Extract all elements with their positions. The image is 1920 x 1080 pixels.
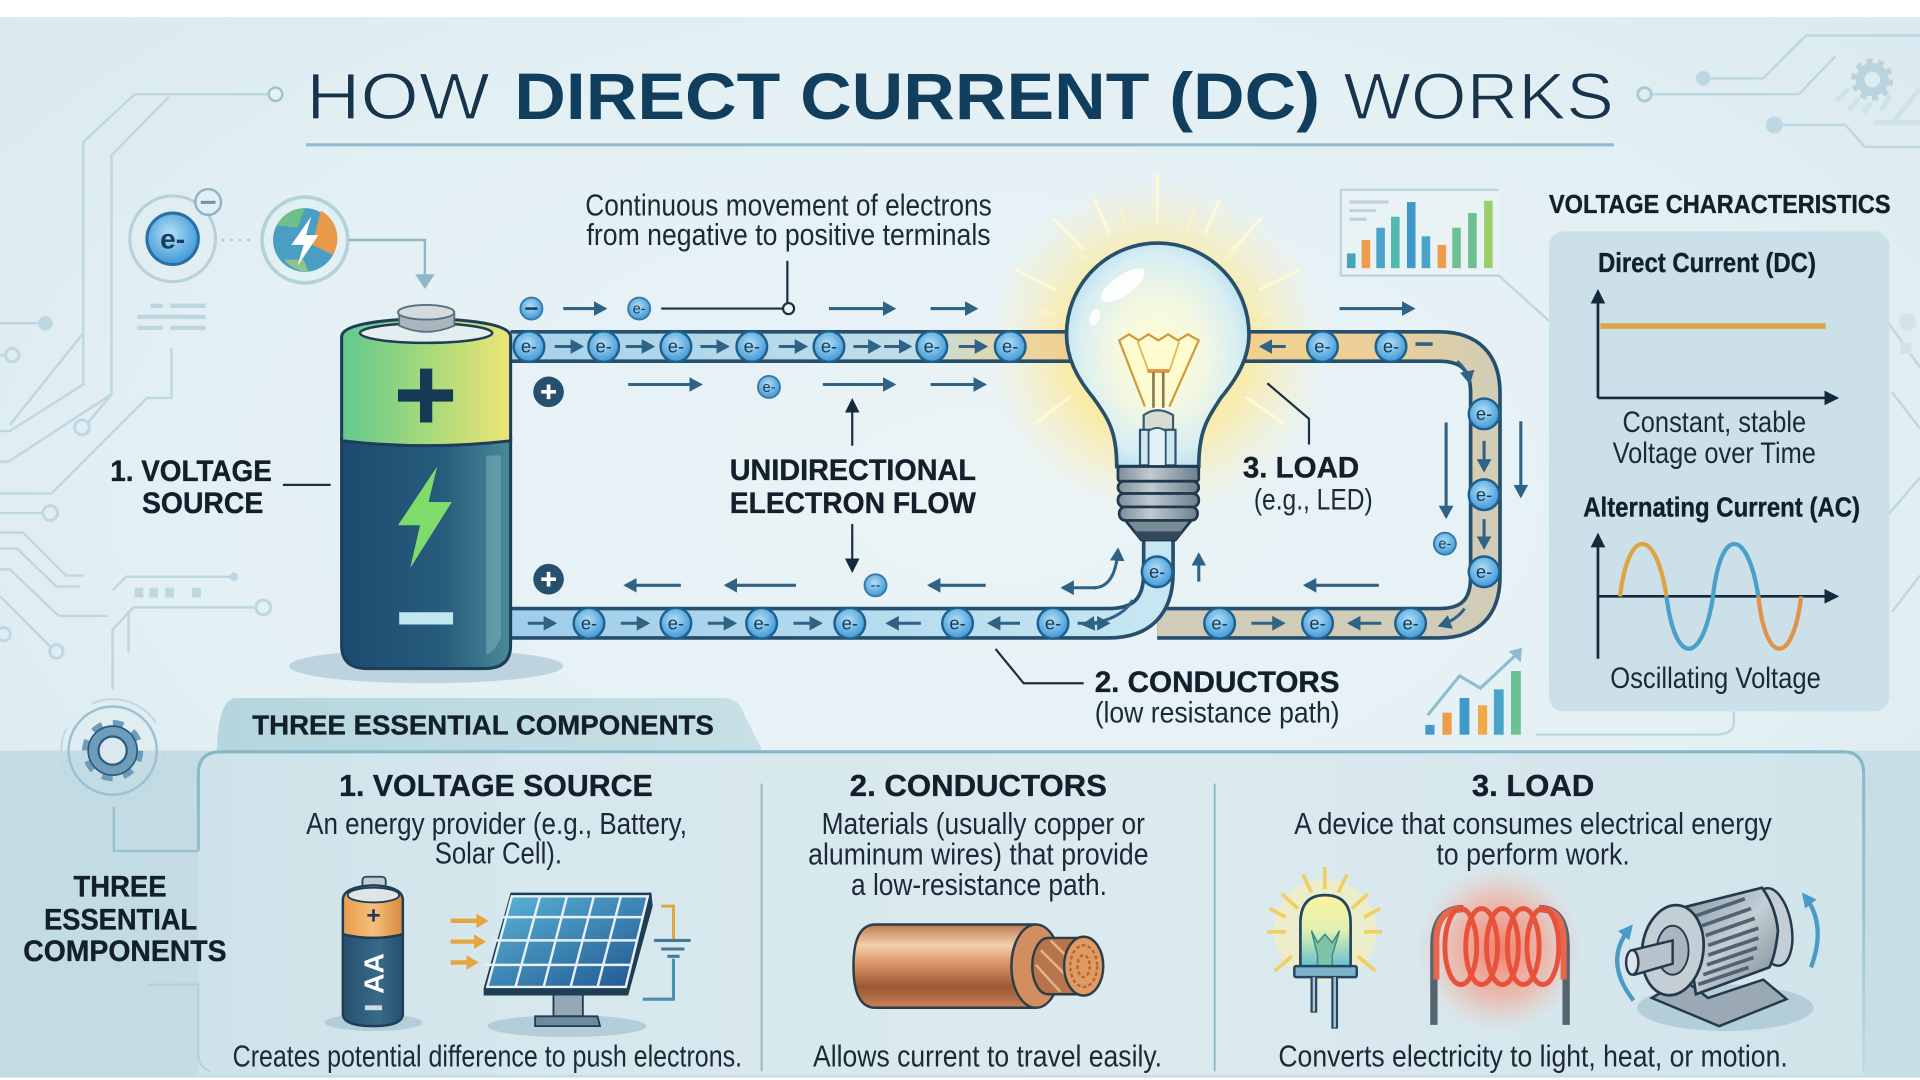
title: WORKS (1343, 60, 1614, 134)
title: DIRECT CURRENT (DC) (514, 60, 1320, 134)
electrons on bottom wire: e- (949, 612, 966, 633)
icon: copper wire (853, 924, 1103, 1008)
column 1: voltage source: Solar Cell). (435, 836, 562, 870)
column 2: conductors: 2. CONDUCTORS (850, 769, 1107, 803)
ac chart (1583, 492, 1860, 695)
electrons on bottom wire (528, 557, 1464, 639)
electrons on top wire: e- (744, 336, 760, 357)
callout: continuous movement: Continuous movement of electrons (585, 189, 992, 223)
icon: AA battery: AA (358, 953, 389, 994)
column 3: load: A device that consumes electrical energy (1294, 807, 1772, 841)
bulb glow (984, 178, 1327, 520)
icon: heating coil (1417, 866, 1583, 1032)
icon: solar panel (484, 893, 691, 1037)
column 3: load: to perform work. (1436, 837, 1630, 871)
label: unidirectional electron flow (730, 400, 976, 571)
column 3: load (1267, 769, 1818, 1074)
electrons on bottom wire: e- (753, 612, 770, 633)
ac chart: Oscillating Voltage (1610, 662, 1821, 695)
positive terminal markers (533, 377, 564, 594)
label: 2. conductors (996, 649, 1340, 729)
icon: gear (61, 699, 198, 851)
bottom band (0, 751, 1920, 1078)
dc chart: Constant, stable (1622, 406, 1806, 439)
column 3: load: Converts electricity to light, heat, or motion. (1278, 1040, 1788, 1074)
electrons on top wire: e- (521, 336, 537, 357)
column 3: load: 3. LOAD (1472, 769, 1594, 803)
electrons on bottom wire: e- (1211, 612, 1228, 633)
left label: three essential components (23, 870, 227, 968)
title: HOW (306, 60, 490, 134)
label: 1. voltage source: 1. VOLTAGE (110, 455, 272, 488)
bulb glass (1067, 243, 1249, 467)
dc chart (1598, 247, 1837, 470)
column 1: voltage source: An energy provider (e.g., Battery, (306, 807, 687, 841)
free electrons and arrows: e- (1438, 537, 1452, 553)
electrons on right wire: e- (1476, 403, 1492, 424)
electrons on right wire: e- (1476, 484, 1492, 505)
column 2: conductors: a low-resistance path. (851, 868, 1107, 902)
electrons on top wire: e- (668, 336, 684, 357)
free electrons and arrows: e- (633, 301, 646, 317)
electrons on bottom wire: e- (1402, 612, 1419, 633)
callout: continuous movement (585, 189, 992, 314)
column 2: conductors (808, 769, 1162, 1074)
column 1: voltage source: 1. VOLTAGE SOURCE (339, 769, 653, 803)
panel: components (147, 752, 1864, 1075)
panel: voltage characteristics (1549, 231, 1889, 711)
tab: three essential components: THREE ESSENTIAL COMPONENTS (252, 710, 714, 741)
left label: three essential components: ESSENTIAL (44, 903, 197, 936)
electrons on bottom wire: e- (1149, 561, 1165, 582)
free electrons and arrows: e- (762, 380, 776, 396)
stem (1144, 410, 1173, 430)
column 2: conductors: aluminum wires) that provide (808, 837, 1149, 871)
column 1: voltage source (233, 769, 742, 1074)
left label: three essential components: THREE (73, 870, 167, 903)
electrons on bottom wire: e- (1045, 612, 1061, 633)
dc chart: Direct Current (DC) (1598, 247, 1816, 278)
electrons on top wire: e- (1383, 336, 1399, 357)
left label: three essential components: COMPONENTS (23, 935, 227, 968)
free electrons and arrows (520, 298, 1521, 596)
bottom wire (511, 534, 1158, 623)
ac chart: Alternating Current (AC) (1583, 492, 1860, 523)
icon: sun arrows (451, 921, 485, 962)
icon: LED (1267, 867, 1382, 1029)
heading: voltage characteristics: VOLTAGE CHARACTERISTICS (1549, 191, 1891, 219)
icon: motor (1617, 885, 1818, 1031)
light bulb (1015, 174, 1300, 540)
label: 2. conductors: 2. CONDUCTORS (1095, 666, 1340, 699)
electrons on top wire: e- (1314, 336, 1331, 357)
electrons on bottom wire: e- (668, 612, 684, 633)
icon: electron and energy source (130, 189, 435, 330)
screw base (1118, 467, 1199, 520)
label: 3. load: 3. LOAD (1243, 452, 1359, 485)
column 2: conductors: Allows current to travel easily. (813, 1040, 1162, 1074)
electrons on top wire: e- (924, 336, 940, 357)
electrons on top wire: e- (596, 336, 612, 357)
title (269, 60, 1614, 146)
electrons on right wire: e- (1476, 561, 1492, 582)
column 2: conductors: Materials (usually copper or (822, 807, 1145, 841)
label: 3. load (1243, 383, 1373, 516)
battery (289, 305, 563, 683)
electrons on bottom wire: e- (842, 612, 858, 633)
free electrons and arrows: -- (871, 578, 881, 594)
tab: three essential components (217, 698, 763, 752)
top wire (511, 333, 1078, 360)
electrons on bottom wire: e- (581, 612, 597, 633)
label: unidirectional electron flow: ELECTRON FLOW (730, 487, 976, 520)
electrons on right wire (1469, 399, 1499, 587)
chart icon growth (1425, 648, 1522, 735)
electrons on top wire (514, 331, 1469, 382)
dc chart: Voltage over Time (1613, 437, 1816, 470)
column 1: voltage source: Creates potential difference to push electrons. (233, 1040, 742, 1074)
label: 2. conductors: (low resistance path) (1095, 696, 1340, 729)
icon: AA battery: + (366, 902, 381, 929)
bulb rays (1015, 174, 1300, 425)
circuit trace decoration (0, 36, 1920, 735)
label: 1. voltage source: SOURCE (142, 487, 263, 520)
filament (1119, 334, 1199, 407)
label: unidirectional electron flow: UNIDIRECTIONAL (730, 454, 976, 487)
electrons on bottom wire: e- (1309, 612, 1326, 633)
label: 3. load: (e.g., LED) (1254, 483, 1373, 516)
electrons on top wire: e- (821, 336, 837, 357)
chart icon top right (1341, 190, 1499, 276)
return wire right side (1157, 347, 1485, 623)
electrons on top wire: e- (1002, 336, 1018, 357)
label: 1. voltage source (110, 455, 331, 520)
icon: electron and energy source: e- (160, 224, 185, 255)
column dividers (762, 784, 1215, 1071)
callout: continuous movement: from negative to positive terminals (587, 218, 991, 252)
icon: AA battery (324, 877, 422, 1031)
